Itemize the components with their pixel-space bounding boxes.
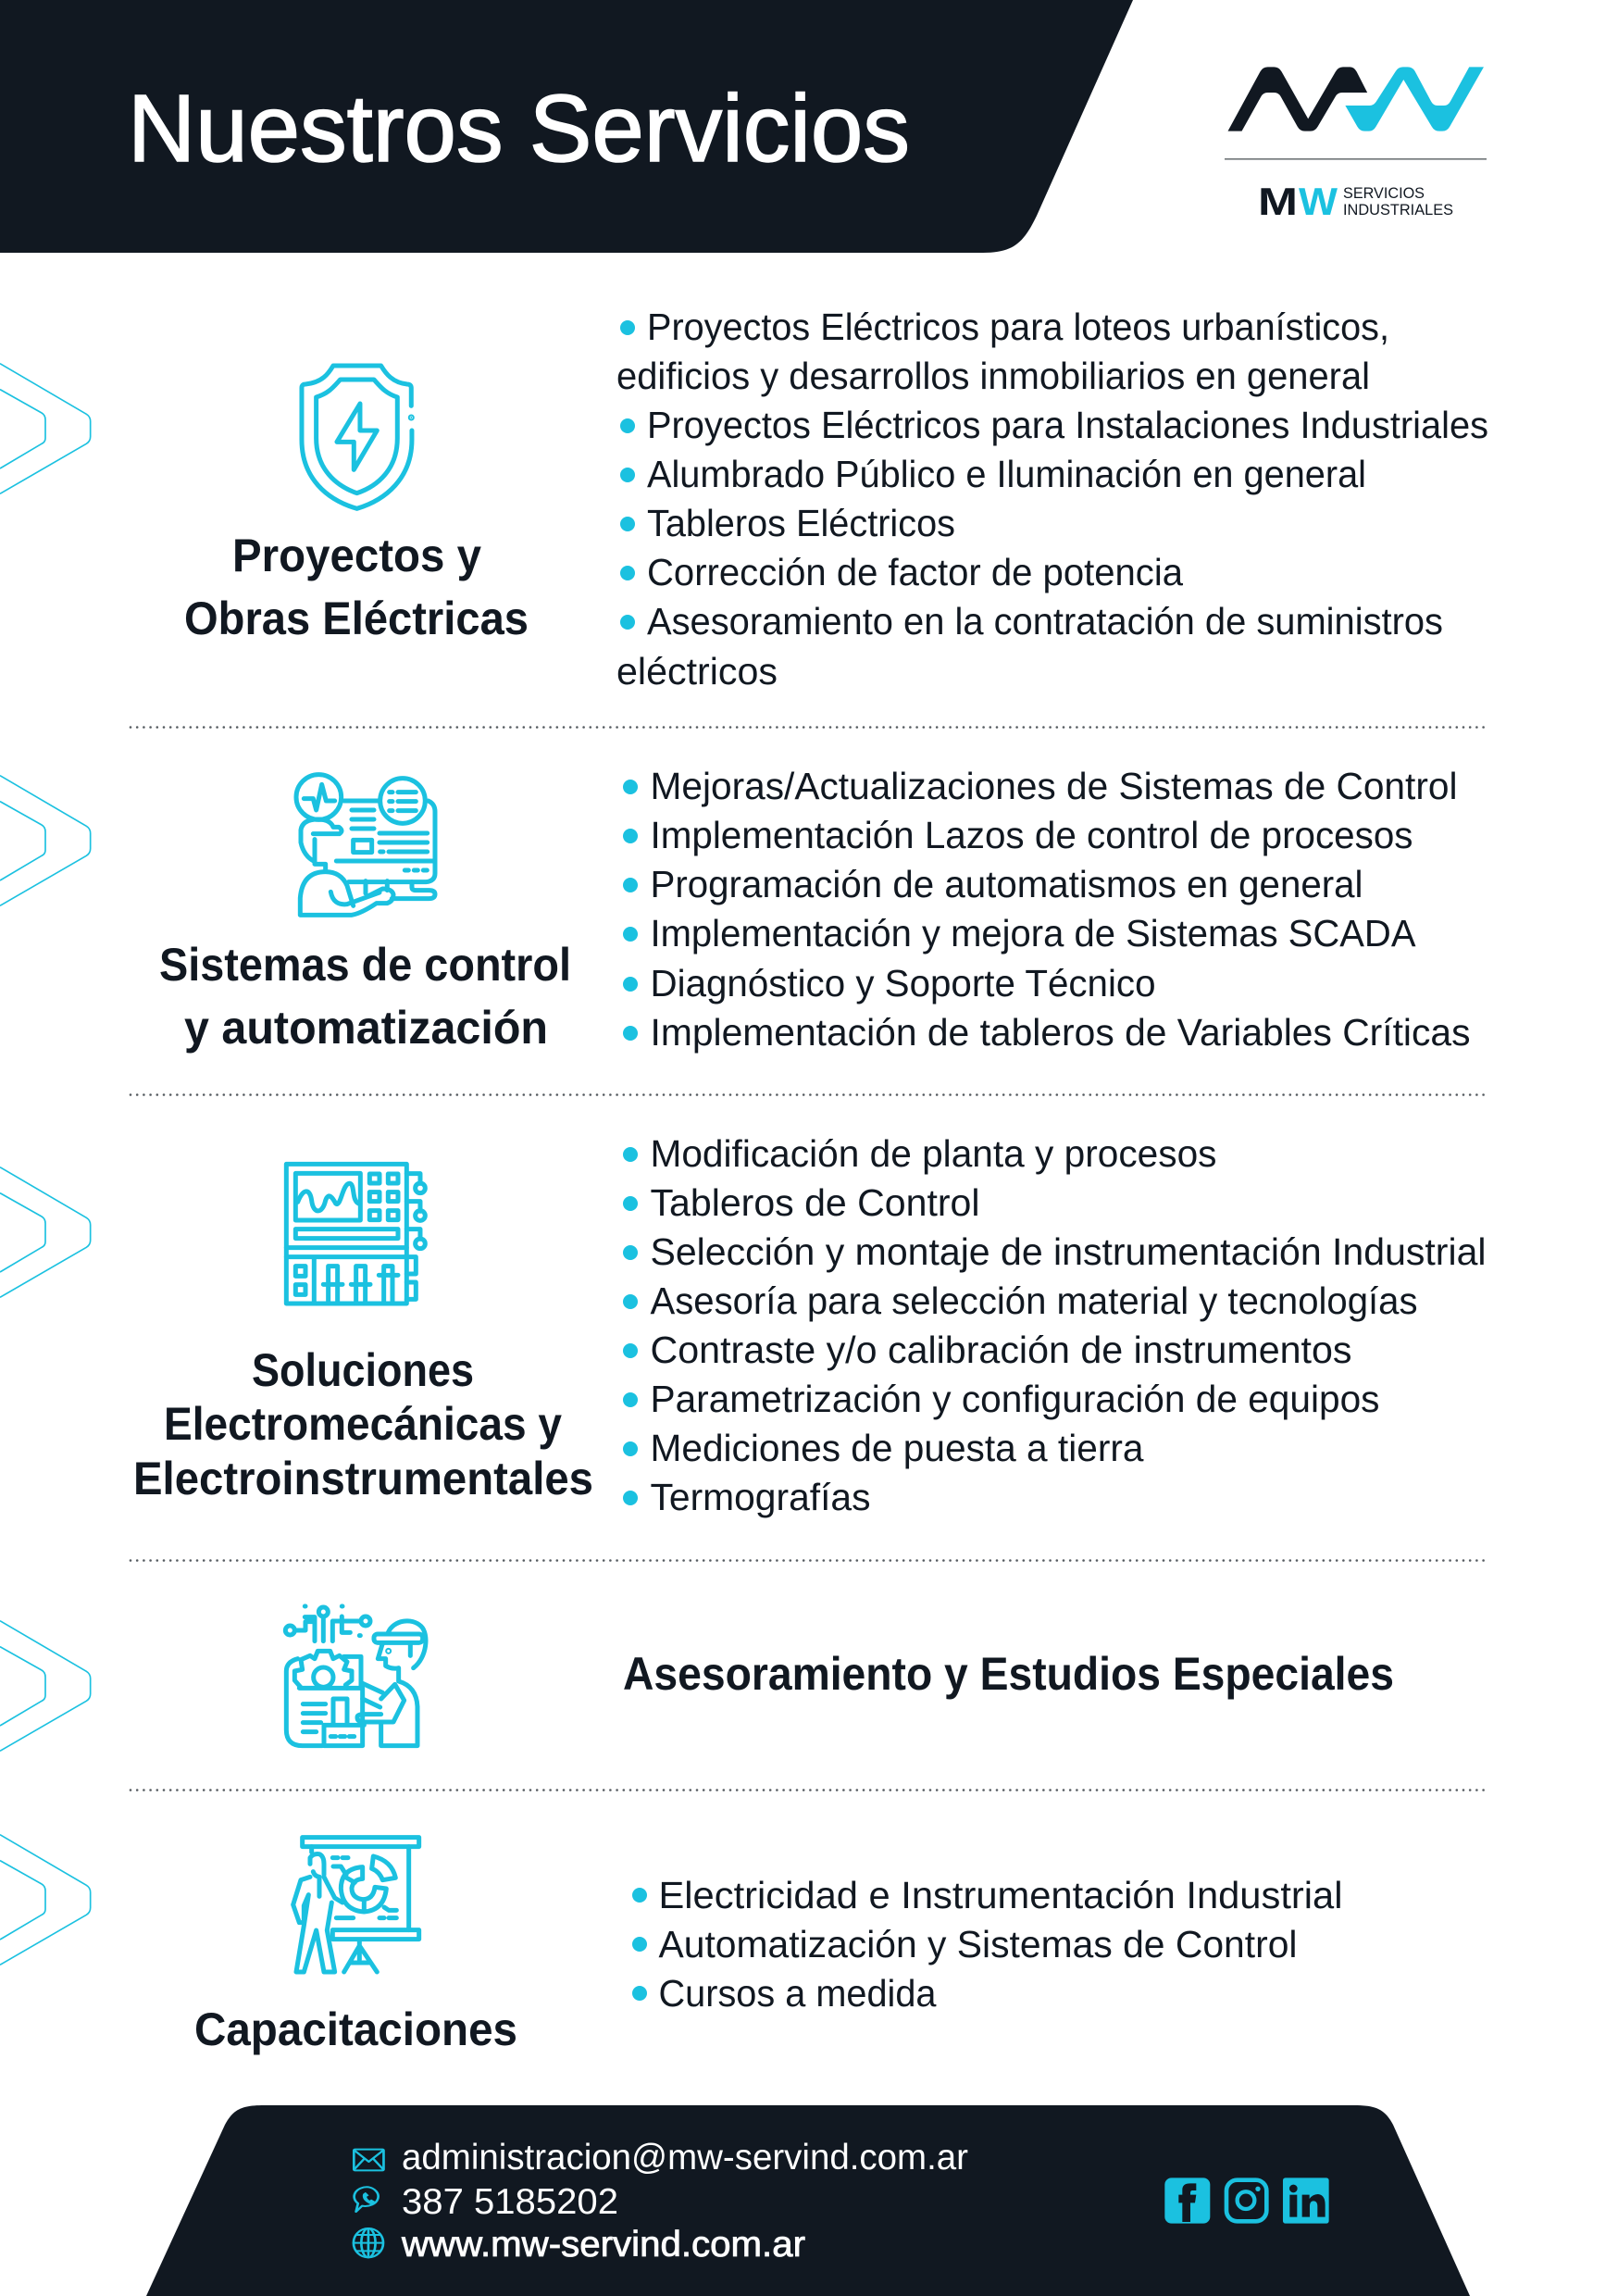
service list: Cursos a medida: [659, 1972, 937, 2015]
service list: Alumbrado Público e Iluminación en general: [647, 453, 1366, 495]
service list: Automatización y Sistemas de Control: [659, 1923, 1298, 1965]
service list: Selección y montaje de instrumentación Industrial: [650, 1230, 1487, 1273]
social icons: [1164, 2177, 1329, 2224]
service list: Modificación de planta y procesos: [650, 1132, 1216, 1175]
logo: [1225, 67, 1487, 223]
chevron decoration 1: [0, 364, 91, 493]
email: administracion@mw-servind.com.ar: [402, 2138, 968, 2177]
logo wordmark: SERVICIOS: [1343, 185, 1425, 202]
heading: Asesoramiento y Estudios Especiales: [623, 1648, 1394, 1700]
phone: 387 5185202: [402, 2182, 618, 2222]
icon: facebook: [1164, 2177, 1210, 2224]
service list: Parametrización y configuración de equipos: [650, 1378, 1379, 1420]
panel: Proyectos y Obras Eléctricas: [184, 306, 1488, 693]
service list: Tableros de Control: [650, 1181, 979, 1224]
icon: presenter at board: [293, 1838, 419, 1972]
service list: Implementación y mejora de Sistemas SCADA: [650, 912, 1416, 955]
heading: Soluciones: [252, 1344, 474, 1396]
icon: operator at monitor: [296, 775, 435, 915]
heading: [133, 1344, 593, 1504]
service list: [623, 1132, 1487, 1518]
contact details: [354, 2138, 968, 2265]
icon: linkedin: [1283, 2177, 1329, 2224]
service list: Mejoras/Actualizaciones de Sistemas de Control: [650, 765, 1457, 807]
service list: Implementación de tableros de Variables Críticas: [650, 1011, 1470, 1054]
service list: Diagnóstico y Soporte Técnico: [650, 962, 1155, 1004]
service list: Termografías: [650, 1476, 870, 1518]
icon: globe: [354, 2228, 383, 2257]
logo wordmark: W: [1299, 180, 1338, 223]
logo wordmark: INDUSTRIALES: [1343, 202, 1453, 218]
heading: Electromecánicas y: [164, 1398, 562, 1450]
header banner: [0, 0, 1133, 253]
website: www.mw-servind.com.ar: [401, 2225, 805, 2265]
heading: Sistemas de control: [159, 939, 571, 991]
service list: Corrección de factor de potencia: [647, 551, 1183, 593]
chevron decoration 3: [0, 1167, 91, 1297]
icon: shield with lightning bolt: [302, 366, 412, 508]
icon: envelope: [354, 2150, 383, 2170]
chevron decoration 5: [0, 1835, 91, 1965]
service list: Electricidad e Instrumentación Industrial: [659, 1874, 1342, 1916]
service list: Asesoramiento en la contratación de suministros: [647, 600, 1443, 643]
service list: Asesoría para selección material y tecnologías: [650, 1279, 1418, 1322]
service list: edificios y desarrollos inmobiliarios en general: [616, 355, 1370, 397]
logo wordmark: M: [1258, 180, 1298, 223]
panel: Soluciones Electromecánicas y Electroinstrumentales: [133, 1132, 1487, 1518]
title: Nuestros Servicios: [128, 75, 910, 181]
heading: y automatización: [184, 1002, 548, 1054]
icon: instagram: [1226, 2180, 1266, 2221]
service list: Tableros Eléctricos: [647, 502, 955, 544]
service list: eléctricos: [616, 650, 778, 693]
heading: [184, 530, 529, 644]
icon: engineer with gear: [285, 1606, 426, 1746]
heading: Capacitaciones: [194, 2003, 517, 2055]
service list: Contraste y/o calibración de instrumentos: [650, 1329, 1351, 1371]
panel: Capacitaciones: [194, 1838, 1342, 2055]
icon: control panel: [286, 1164, 425, 1304]
icon: whatsapp: [355, 2187, 379, 2212]
heading: Obras Eléctricas: [184, 593, 529, 644]
logo mark: [1228, 67, 1484, 131]
panel: Sistemas de control y automatización: [159, 765, 1470, 1054]
service list: Implementación Lazos de control de procesos: [650, 814, 1413, 856]
service list: [616, 306, 1488, 693]
logo rule: [1225, 158, 1487, 160]
chevron decoration 2: [0, 776, 91, 905]
service list: Mediciones de puesta a tierra: [650, 1427, 1144, 1469]
heading: Proyectos y: [232, 530, 481, 581]
service list: Programación de automatismos en general: [650, 863, 1363, 905]
service list: [623, 765, 1470, 1054]
logo wordmark: [1258, 180, 1453, 223]
service list: [632, 1874, 1342, 2015]
footer band: [146, 2105, 1470, 2296]
chevron decoration 4: [0, 1621, 91, 1751]
service list: Proyectos Eléctricos para Instalaciones Industriales: [647, 404, 1488, 446]
service list: Proyectos Eléctricos para loteos urbanísticos,: [647, 306, 1389, 348]
heading: [159, 939, 571, 1054]
panel: Asesoramiento y Estudios Especiales: [285, 1606, 1394, 1746]
heading: Electroinstrumentales: [133, 1453, 593, 1504]
